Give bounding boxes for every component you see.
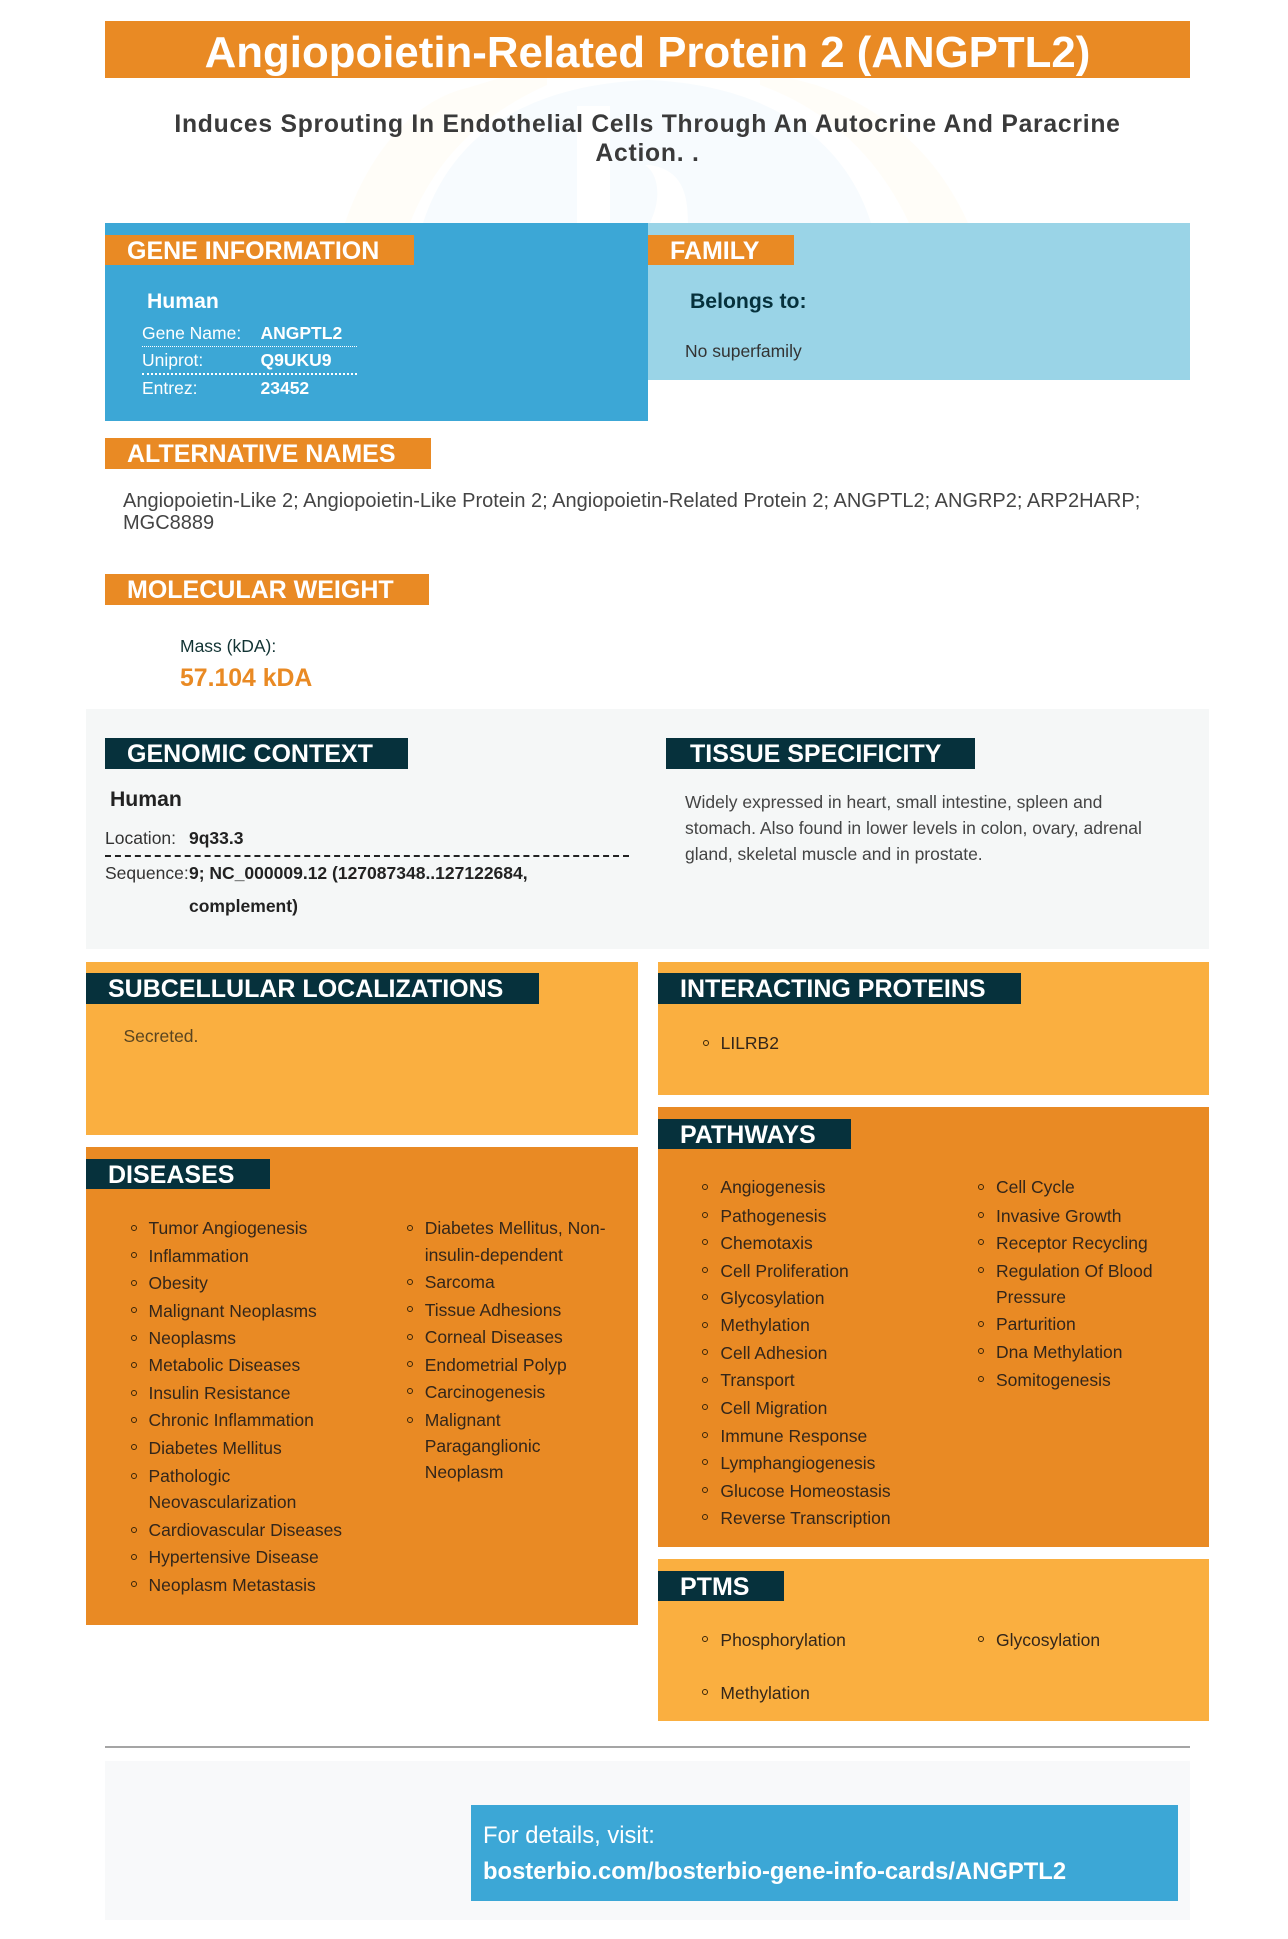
uniprot row: Q9UKU9 [260,350,332,370]
diseases list column 1: Cardiovascular Diseases [148,1520,342,1540]
diseases list column 2: Paraganglionic [425,1436,540,1456]
background watermark [0,0,1288,223]
gene name row: Gene Name: [142,323,241,343]
pathways list column 2 [978,1177,1153,1390]
localization text: Secreted. [124,1026,198,1046]
gene name row [142,323,342,343]
tissue specificity text: stomach. Also found in lower levels in colon, ovary, adrenal [685,818,1142,838]
sequence row: Sequence: [105,863,189,883]
diseases list column 2: Malignant [425,1410,501,1430]
heading: diseases: DISEASES [108,1161,234,1189]
sequence row: 9; NC_000009.12 (127087348..127122684, [189,863,528,883]
title: Angiopoietin-Related Protein 2 (ANGPTL2) [205,28,1090,77]
heading: subcellular localizations: SUBCELLULAR LOCALIZATIONS [108,975,503,1003]
diseases list column 1: Inflammation [148,1246,249,1266]
diseases list column 1: Diabetes Mellitus [148,1438,282,1458]
sequence row [105,863,528,916]
alternative names text: Angiopoietin-Like 2; Angiopoietin-Like Protein 2; Angiopoietin-Related Protein 2; ANGPTL2; ANGRP2; ARP2HARP; [123,490,1140,512]
pathways list column 1: Pathogenesis [720,1206,826,1226]
callout url: bosterbio.com/bosterbio-gene-info-cards/ANGPTL2 [483,1858,1066,1885]
diseases list column 2: Corneal Diseases [425,1327,563,1347]
diseases list column 2: Carcinogenesis [425,1382,545,1402]
mass value: 57.104 kDA [180,665,312,692]
callout: details link [471,1805,1178,1901]
diseases list column 2: Endometrial Polyp [425,1355,567,1375]
diseases list column 1: Neovascularization [148,1492,296,1512]
diseases list column 1: Pathologic [148,1466,230,1486]
panel: diseases [86,1147,638,1625]
callout label: For details, visit: [483,1822,655,1849]
tissue specificity text: gland, skeletal muscle and in prostate. [685,844,983,864]
diseases list column 1: Neoplasms [148,1328,236,1348]
subtitle [174,111,1121,167]
belongs to label: Belongs to: [690,290,807,313]
panel: gene information [105,223,648,421]
panel: pathways [658,1107,1209,1547]
pathways list column 1 [702,1177,891,1528]
diseases list column 2: insulin-dependent [425,1245,563,1265]
pathways list column 1: Glycosylation [720,1288,824,1308]
diseases list column 2 [407,1218,606,1482]
mass label: Mass (kDA): [180,636,276,656]
pathways list column 2: Somitogenesis [996,1370,1111,1390]
pathways list column 2: Cell Cycle [996,1177,1075,1197]
ptm item: methylation: Methylation [720,1683,810,1703]
tissue specificity text: Widely expressed in heart, small intestine, spleen and [685,792,1102,812]
alternative names text: MGC8889 [123,512,214,534]
diseases list column 1: Metabolic Diseases [148,1355,300,1375]
location row: 9q33.3 [189,828,243,848]
pathways list column 1: Glucose Homeostasis [720,1481,891,1501]
tissue specificity text [685,792,1142,864]
pathways list column 2: Invasive Growth [996,1206,1121,1226]
pathways list column 1: Cell Proliferation [720,1260,849,1280]
heading: tissue specificity: TISSUE SPECIFICITY [690,740,941,768]
heading: molecular weight: MOLECULAR WEIGHT [127,576,394,604]
species label: Human [147,290,219,313]
pathways list column 1: Immune Response [720,1426,867,1446]
pathways list column 1: Reverse Transcription [720,1508,891,1528]
diseases list column 1: Obesity [148,1273,208,1293]
alternative names text [123,490,1140,534]
uniprot row [142,350,332,370]
footer panel [105,1761,1190,1920]
pathways list column 1: Angiogenesis [720,1177,825,1197]
diseases list column 1: Tumor Angiogenesis [148,1218,307,1238]
panel: subcellular localizations [86,962,638,1135]
sequence row: complement) [189,896,298,916]
pathways list column 1: Lymphangiogenesis [720,1453,875,1473]
diseases list column 1: Neoplasm Metastasis [148,1575,316,1595]
superfamily text: No superfamily [685,341,802,361]
heading: pathways [658,1119,851,1149]
pathways list column 2: Pressure [996,1287,1066,1307]
interacting protein item: LILRB2 [721,1033,779,1053]
diseases list column 1: Hypertensive Disease [148,1547,319,1567]
diseases list column 2: Sarcoma [425,1272,495,1292]
pathways list column 1: Methylation [720,1315,810,1335]
panel: genomic context and tissue specificity [86,709,1209,949]
diseases list column 2: Tissue Adhesions [425,1300,561,1320]
heading: pathways: PATHWAYS [680,1121,816,1149]
diseases list column 2: Diabetes Mellitus, Non- [425,1218,606,1238]
heading: genomic context: GENOMIC CONTEXT [127,740,373,768]
pathways list column 1: Cell Adhesion [720,1343,827,1363]
entrez row: Entrez: [142,378,197,398]
heading: diseases [86,1159,270,1189]
location row: Location: [105,828,176,848]
pathways list column 2: Parturition [996,1314,1076,1334]
panel: ptms [658,1559,1209,1721]
species label: Human [110,788,182,811]
pathways list column 1: Transport [720,1370,795,1390]
heading: ptms [658,1571,784,1601]
diseases list column 1: Malignant Neoplasms [148,1300,317,1320]
pathways list column 2: Receptor Recycling [996,1232,1148,1252]
entrez row [142,378,309,398]
heading: family [648,235,794,265]
pathways list column 1: Cell Migration [720,1398,827,1418]
heading: gene information: GENE INFORMATION [127,237,379,265]
diseases list column 1: Chronic Inflammation [148,1410,314,1430]
heading: family: FAMILY [670,237,759,265]
ptm item: phosphorylation: Phosphorylation [720,1630,846,1650]
subtitle: Induces Sprouting In Endothelial Cells Through An Autocrine And Paracrine [174,111,1121,138]
diseases list column 1 [131,1218,342,1595]
heading: ptms: PTMS [680,1573,749,1601]
heading: interacting proteins: INTERACTING PROTEINS [680,975,986,1003]
pathways list column 2: Regulation Of Blood [996,1260,1153,1280]
gene name row: ANGPTL2 [260,323,342,343]
uniprot row: Uniprot: [142,350,203,370]
panel: family [648,223,1190,380]
heading: alternative names: ALTERNATIVE NAMES [127,440,396,468]
panel: interacting proteins [658,962,1209,1095]
pathways list column 1: Chemotaxis [720,1232,813,1252]
ptm item: glycosylation: Glycosylation [996,1630,1100,1650]
entrez row: 23452 [260,378,309,398]
diseases list column 1: Insulin Resistance [148,1383,291,1403]
subtitle: Action. . [595,140,700,167]
pathways list column 2: Dna Methylation [996,1342,1122,1362]
diseases list column 2: Neoplasm [425,1462,503,1482]
location row [105,828,243,848]
